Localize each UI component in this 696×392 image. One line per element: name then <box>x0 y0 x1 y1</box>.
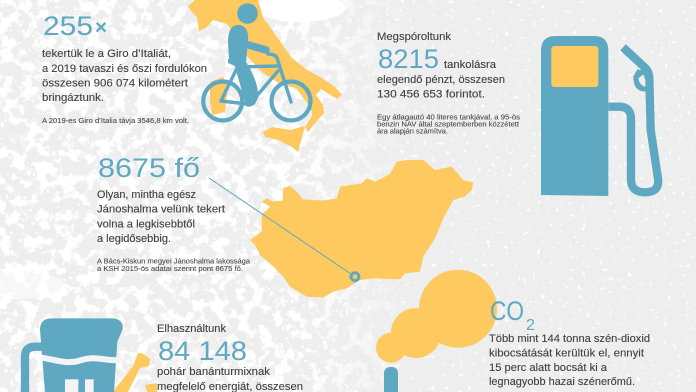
icon: cyclist <box>203 3 310 121</box>
stat: fuel savings: 8215 <box>378 44 439 74</box>
stat: 255 times Giro d'Italia: A 2019-es Giro d’Italia távja 3546,8 km volt. <box>42 118 189 125</box>
icon: smoke cloud <box>376 270 497 363</box>
icon: fuel pump <box>541 36 658 196</box>
icon: banana <box>113 353 157 392</box>
marker line: Jánoshalma <box>209 178 359 281</box>
stat: CO2: legnagyobb hazai szénerőmű. <box>489 376 635 388</box>
stat: 8675 people: A Bács-Kiskun megyei Jánoshalma lakossága <box>97 259 250 266</box>
stat: 255 times Giro d'Italia: a 2019 tavaszi és őszi fordulókon <box>42 63 207 75</box>
stat: banana smoothie: Elhasználtunk <box>157 323 226 335</box>
stat: 8675 people: Olyan, mintha egész <box>97 189 196 201</box>
map: Italy <box>188 0 342 152</box>
map: Hungary <box>250 160 473 298</box>
stat: fuel savings: ára alapján számítva. <box>377 129 448 136</box>
icon: chimney <box>384 367 398 392</box>
icon: smoothie mug <box>25 318 123 392</box>
stat: fuel savings: elegendő pénzt, összesen <box>377 74 505 86</box>
stat: fuel savings: tankolásra <box>444 59 497 71</box>
stat: 255 times Giro d'Italia: bringáztunk. <box>42 92 104 104</box>
stat: 255 times Giro d'Italia <box>42 11 207 125</box>
stat: 255 times Giro d'Italia: összesen 906 074 kilométert <box>42 78 188 90</box>
stat: CO2: kibocsátását kerültük el, ennyit <box>489 348 644 360</box>
stat: 255 times Giro d'Italia: × <box>95 17 107 39</box>
stat: 255 times Giro d'Italia: tekertük le a Giro d’Italiát, <box>42 48 171 60</box>
stat: banana smoothie: pohár banánturmixnak <box>157 366 271 378</box>
stat: CO2: 2 <box>526 317 535 334</box>
stat: 8675 people: Jánoshalma velünk tekert <box>97 204 225 216</box>
stat: 8675 people: volna a legkisebbtől <box>97 218 195 230</box>
stat: fuel savings: 130 456 653 forintot. <box>377 89 485 101</box>
stat: CO2 <box>489 296 650 388</box>
stat: banana smoothie: 84 148 <box>158 336 247 366</box>
stat: fuel savings: benzin NAV által szeptemberben közzétett <box>377 122 519 129</box>
stat: fuel savings <box>377 31 521 136</box>
stat: 8675 people: a KSH 2015-ös adatai szerint pont 8675 fő. <box>97 266 243 273</box>
stat: 255 times Giro d'Italia: 255 <box>43 11 93 41</box>
stat: banana smoothie <box>157 323 303 392</box>
stat: 8675 people: a legidősebbig. <box>97 233 171 245</box>
stat: CO2: Több mint 144 tonna szén-dioxid <box>489 333 650 345</box>
stat: 8675 people: 8675 fő <box>98 153 200 183</box>
stat: CO2: CO <box>490 296 524 326</box>
stat: fuel savings: Egy átlagautó 40 literes tankjával, a 95-ös <box>377 114 521 122</box>
stat: CO2: 15 perc alatt bocsát ki a <box>489 362 608 374</box>
stat: fuel savings: Megspóroltunk <box>377 31 452 43</box>
stat: 8675 people <box>97 153 250 273</box>
